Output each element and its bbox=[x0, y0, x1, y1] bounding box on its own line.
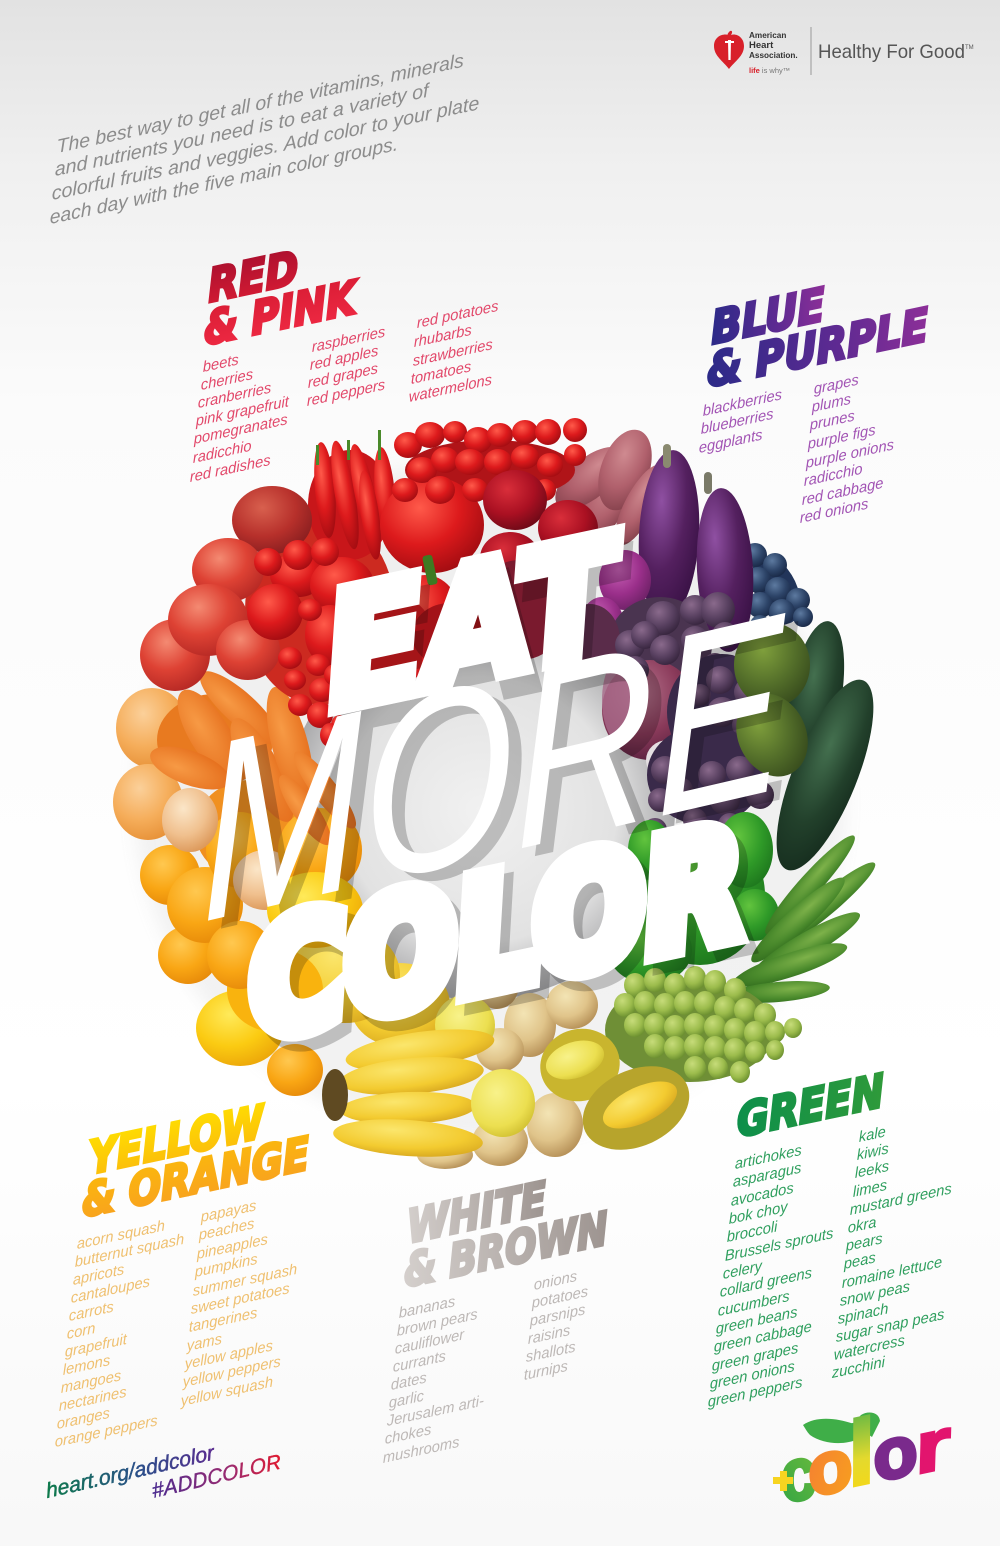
group: yellow and orange heading: YELLOW bbox=[88, 1094, 266, 1185]
list: red and pink foods: raspberries bbox=[312, 323, 386, 356]
list: yellow and orange foods: butternut squash bbox=[75, 1231, 184, 1271]
list: blue and purple foods: prunes bbox=[809, 407, 855, 434]
intro text: colorful fruits and veggies. Add color to your plate bbox=[51, 93, 480, 205]
plus sign bbox=[773, 1471, 793, 1491]
list: green foods: avocados bbox=[731, 1179, 794, 1210]
list: green foods: celery bbox=[723, 1257, 764, 1283]
fruit and vegetable circle bbox=[113, 418, 893, 1169]
title word: EAT: EAT bbox=[317, 501, 635, 746]
list: yellow and orange foods: yellow peppers bbox=[182, 1353, 281, 1391]
list: green foods: limes bbox=[853, 1177, 888, 1201]
intro text: each day with the five main color groups. bbox=[49, 134, 398, 229]
list: blue and purple foods bbox=[699, 371, 895, 527]
title shadows: COLOR bbox=[250, 802, 763, 1084]
tagline: life is why: life is why™ bbox=[749, 66, 790, 75]
letter o: o bbox=[865, 1410, 924, 1496]
trademark: TM bbox=[965, 45, 974, 51]
list: green foods: asparagus bbox=[733, 1159, 802, 1191]
list: green foods: sugar snap peas bbox=[836, 1306, 945, 1346]
title shadows: EAT bbox=[325, 519, 643, 764]
list: red and pink foods bbox=[190, 297, 499, 486]
list: yellow and orange foods: mangoes bbox=[61, 1367, 122, 1397]
list: blue and purple foods: purple onions bbox=[805, 436, 895, 472]
letter c: c bbox=[771, 1430, 824, 1519]
title word: MORE: MORE bbox=[198, 558, 789, 976]
group: yellow and orange heading: & ORANGE bbox=[81, 1127, 311, 1228]
list: white and brown foods: bananas bbox=[399, 1293, 456, 1322]
list: yellow and orange foods: pineapples bbox=[196, 1231, 269, 1263]
title shadows bbox=[211, 519, 802, 1084]
list: green foods: collard greens bbox=[720, 1264, 813, 1301]
list: green foods: artichokes bbox=[735, 1142, 802, 1173]
group: green heading: GREEN bbox=[736, 1064, 885, 1148]
list: white and brown foods: turnips bbox=[524, 1357, 569, 1384]
list: red and pink foods: beets bbox=[203, 351, 239, 376]
list: yellow and orange foods: oranges bbox=[57, 1405, 111, 1433]
list: red and pink foods: cranberries bbox=[198, 379, 272, 412]
list: white and brown foods: currants bbox=[393, 1348, 447, 1376]
list: red and pink foods: cherries bbox=[201, 366, 254, 394]
list: red and pink foods: red radishes bbox=[190, 452, 271, 486]
list: green foods: green peppers bbox=[708, 1374, 803, 1411]
list: green foods: green onions bbox=[710, 1358, 795, 1393]
group: white and brown heading: WHITE bbox=[406, 1171, 548, 1254]
list: yellow and orange foods: pumpkins bbox=[194, 1250, 258, 1281]
list: white and brown foods: shallots bbox=[526, 1338, 576, 1366]
list: yellow and orange foods bbox=[55, 1197, 297, 1451]
list: white and brown foods: dates bbox=[391, 1369, 427, 1394]
logo: American Heart Association and Healthy For Good bbox=[714, 27, 974, 75]
produce: red and pink bbox=[140, 418, 598, 747]
list: green foods: okra bbox=[848, 1214, 877, 1237]
list: red and pink foods: pomegranates bbox=[193, 411, 288, 448]
list: white and brown foods: onions bbox=[534, 1268, 578, 1294]
list: red and pink foods: pink grapefruit bbox=[195, 393, 290, 430]
list: green foods: romaine lettuce bbox=[842, 1254, 942, 1292]
organization name: Association. bbox=[749, 51, 798, 60]
list: blue and purple foods: red onions bbox=[800, 495, 869, 527]
letter r: r bbox=[907, 1403, 961, 1488]
list: yellow and orange foods: summer squash bbox=[193, 1261, 297, 1300]
list: red and pink foods: red peppers bbox=[307, 376, 386, 410]
list: yellow and orange foods: nectarines bbox=[59, 1383, 127, 1415]
list: white and brown foods: chokes bbox=[385, 1421, 432, 1448]
list: white and brown foods bbox=[383, 1268, 589, 1467]
logo: plus color bbox=[771, 1401, 961, 1519]
list: red and pink foods: strawberries bbox=[413, 336, 493, 370]
list: green foods: zucchini bbox=[831, 1354, 886, 1382]
list: yellow and orange foods: yellow apples bbox=[184, 1337, 274, 1373]
group: blue and purple heading: BLUE bbox=[710, 278, 826, 355]
list: yellow and orange foods: apricots bbox=[73, 1261, 125, 1289]
list: yellow and orange foods: lemons bbox=[63, 1352, 111, 1379]
group: red and pink heading: & PINK bbox=[203, 270, 360, 356]
divider bbox=[810, 27, 812, 75]
intro text: The best way to get all of the vitamins, minerals bbox=[56, 50, 465, 158]
web address: heart.org/addcolor bbox=[45, 1441, 216, 1503]
icon: torch bbox=[725, 40, 734, 60]
Healthy For Good: Healthy For Good bbox=[818, 41, 965, 63]
list: blue and purple foods: blueberries bbox=[701, 405, 774, 438]
list: green foods: green beans bbox=[716, 1303, 798, 1338]
list: white and brown foods: potatoes bbox=[531, 1283, 589, 1312]
intro text bbox=[49, 50, 480, 229]
list: white and brown foods: mushrooms bbox=[383, 1434, 460, 1467]
icon: leaf bbox=[803, 1413, 880, 1443]
list: green foods: leeks bbox=[855, 1158, 890, 1182]
list: green foods: green grapes bbox=[712, 1339, 799, 1375]
list: green foods: broccoli bbox=[727, 1218, 778, 1246]
soft shadow bbox=[135, 460, 845, 1140]
list: white and brown foods: raisins bbox=[528, 1322, 571, 1348]
list: red and pink foods: red grapes bbox=[308, 360, 379, 392]
list: yellow and orange foods: carrots bbox=[69, 1298, 114, 1325]
produce: purple and blue bbox=[545, 422, 813, 842]
letter l: l bbox=[836, 1401, 887, 1506]
title shadows: MORE bbox=[211, 566, 802, 984]
list: white and brown foods: garlic bbox=[389, 1387, 425, 1412]
list: yellow and orange foods: orange peppers bbox=[55, 1412, 158, 1451]
list: green foods: kiwis bbox=[857, 1140, 889, 1164]
list: green foods: bok choy bbox=[729, 1198, 789, 1228]
center plate bbox=[285, 620, 675, 1000]
list: white and brown foods: parsnips bbox=[529, 1301, 586, 1330]
intro text: and nutrients you need is to eat a variety of bbox=[54, 80, 431, 181]
list: yellow and orange foods: corn bbox=[67, 1320, 96, 1343]
produce: yellow and brown bbox=[290, 927, 703, 1169]
list: yellow and orange foods: grapefruit bbox=[65, 1331, 128, 1361]
list: red and pink foods: watermelons bbox=[409, 371, 493, 406]
list: white and brown foods: Jerusalem arti- bbox=[386, 1392, 484, 1430]
list: yellow and orange foods: acorn squash bbox=[77, 1217, 165, 1253]
list: green foods: green cabbage bbox=[714, 1318, 812, 1356]
list: green foods: Brussels sprouts bbox=[725, 1225, 834, 1265]
list: red and pink foods: red potatoes bbox=[417, 297, 499, 332]
produce: green bbox=[605, 617, 893, 1083]
list: green foods: watercress bbox=[834, 1332, 905, 1364]
list: green foods bbox=[708, 1123, 952, 1411]
list: green foods: cucumbers bbox=[718, 1288, 790, 1320]
list: blue and purple foods: plums bbox=[811, 391, 852, 416]
list: blue and purple foods: eggplants bbox=[699, 426, 763, 457]
list: yellow and orange foods: yams bbox=[186, 1330, 223, 1355]
list: yellow and orange foods: yellow squash bbox=[180, 1373, 273, 1410]
hashtag: #ADDCOLOR bbox=[151, 1450, 282, 1503]
list: red and pink foods: rhubarbs bbox=[414, 322, 472, 351]
list: red and pink foods: radicchio bbox=[193, 437, 252, 467]
list: blue and purple foods: radicchio bbox=[804, 460, 863, 490]
list: green foods: kale bbox=[859, 1123, 886, 1146]
list: blue and purple foods: purple figs bbox=[807, 421, 876, 453]
title word: COLOR: COLOR bbox=[241, 792, 754, 1074]
group: white and brown heading: & BROWN bbox=[403, 1202, 609, 1298]
main title: EAT MORE COLOR bbox=[198, 501, 802, 1084]
letter o: o bbox=[800, 1424, 859, 1512]
list: yellow and orange foods: papayas bbox=[200, 1197, 257, 1226]
list: yellow and orange foods: sweet potatoes bbox=[191, 1280, 290, 1318]
list: green foods: snow peas bbox=[840, 1278, 911, 1310]
list: yellow and orange foods: peaches bbox=[198, 1215, 255, 1244]
list: yellow and orange foods: cantaloupes bbox=[71, 1273, 151, 1307]
list: blue and purple foods: grapes bbox=[814, 371, 859, 398]
list: white and brown foods: cauliflower bbox=[395, 1326, 465, 1358]
list: red and pink foods: red apples bbox=[310, 342, 379, 374]
produce: orange and yellow bbox=[113, 661, 364, 1096]
list: green foods: pears bbox=[845, 1230, 883, 1255]
list: green foods: spinach bbox=[838, 1300, 889, 1328]
organization name: American bbox=[749, 31, 786, 40]
list: green foods: mustard greens bbox=[850, 1180, 952, 1219]
group: red and pink heading: RED bbox=[207, 241, 300, 313]
list: yellow and orange foods: tangerines bbox=[189, 1304, 258, 1336]
list: blue and purple foods: red cabbage bbox=[802, 475, 884, 509]
icon: heart bbox=[714, 31, 744, 69]
list: red and pink foods: tomatoes bbox=[411, 358, 472, 388]
list: green foods: peas bbox=[843, 1249, 876, 1273]
group: blue and purple heading: & PURPLE bbox=[706, 298, 930, 398]
list: white and brown foods: brown pears bbox=[397, 1306, 478, 1340]
organization name: Heart bbox=[749, 40, 774, 51]
list: blue and purple foods: blackberries bbox=[703, 386, 783, 420]
